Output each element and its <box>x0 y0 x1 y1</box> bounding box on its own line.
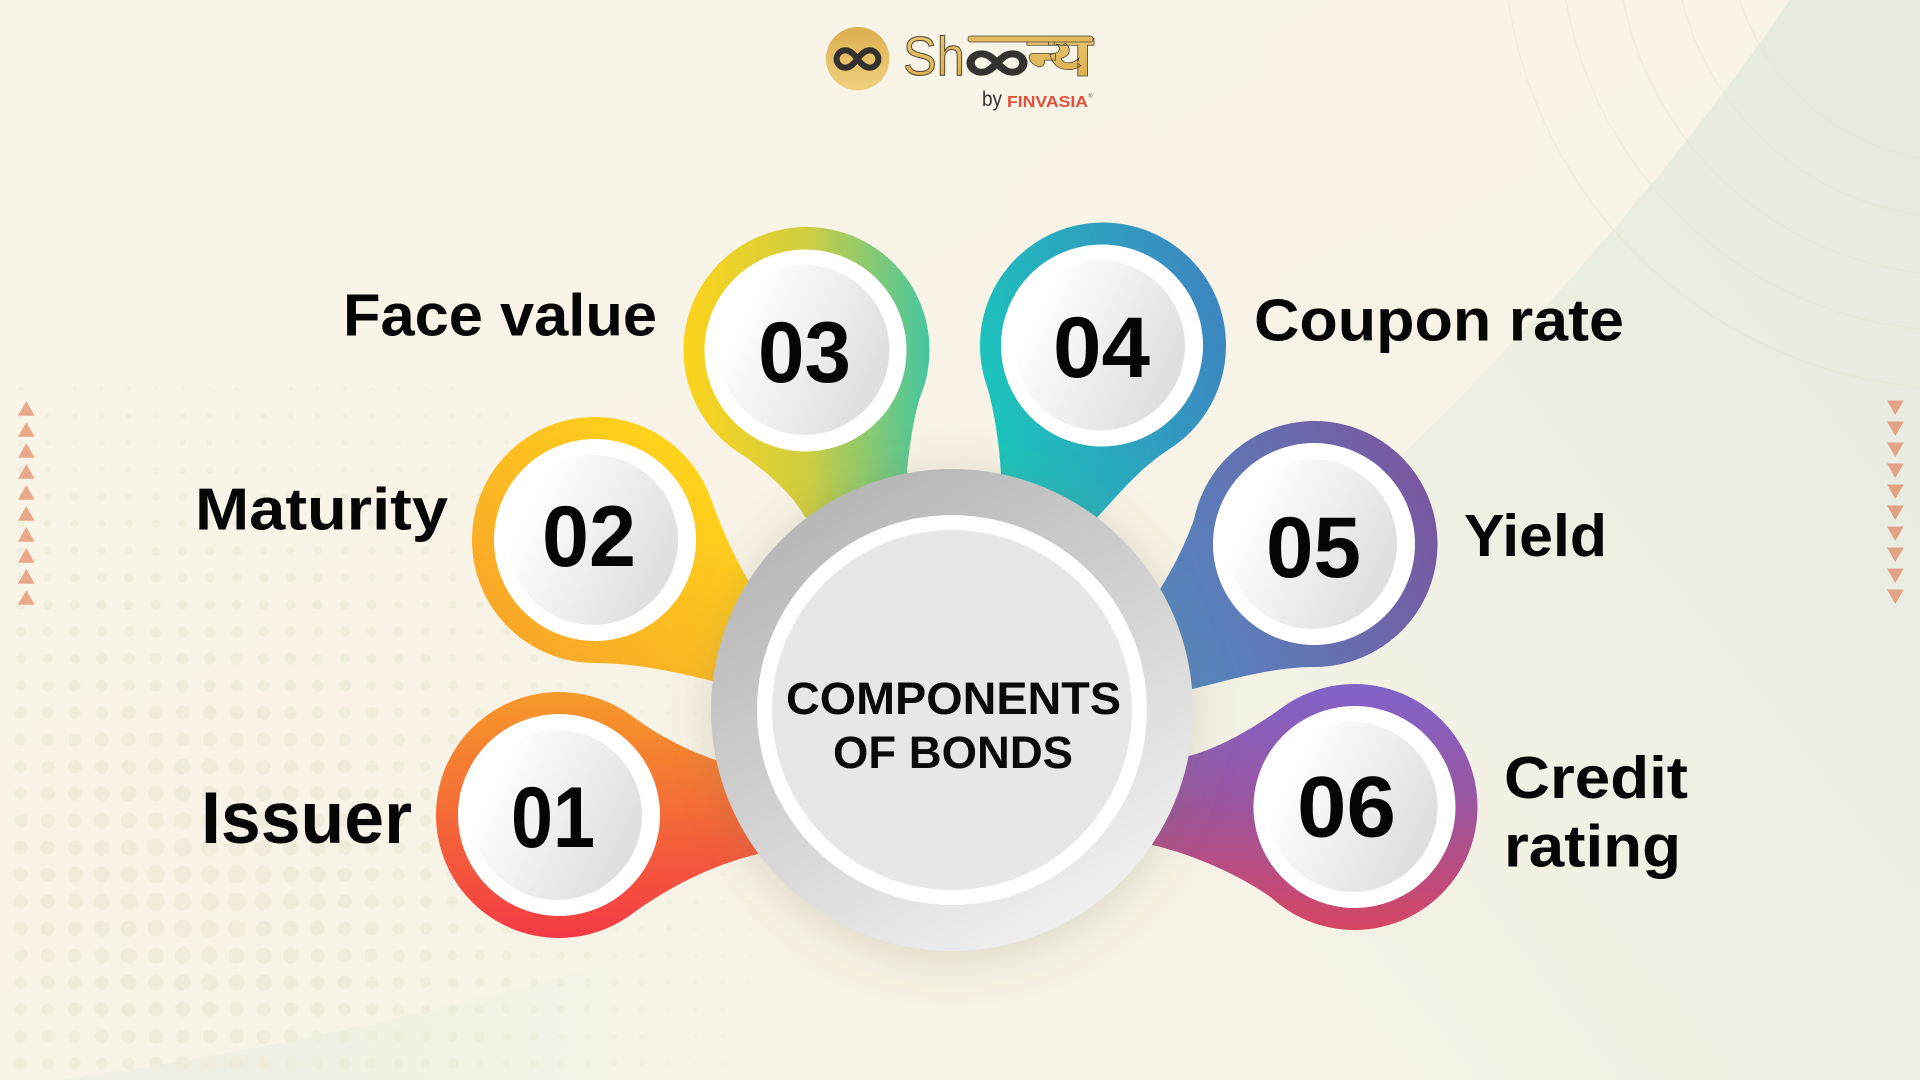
label: credit rating: Credit <box>1504 745 1688 811</box>
petal 06 <box>1100 684 1478 930</box>
concentric arcs <box>1508 0 1920 387</box>
logo by finvasia: ® <box>1088 93 1093 100</box>
number badge 06 <box>1254 706 1456 908</box>
left triangle column <box>18 401 35 605</box>
center title: COMPONENTS <box>786 673 1121 724</box>
petal 05 <box>1100 421 1438 700</box>
number badge 01 <box>458 714 660 916</box>
logo by finvasia: FINVASIA <box>1007 94 1088 111</box>
logo wordmark: न्य <box>1027 22 1094 89</box>
center circle <box>711 469 1193 951</box>
label: issuer: Issuer <box>201 778 412 859</box>
number badge 02 <box>494 439 696 641</box>
logo icon <box>826 27 889 90</box>
number badge 04: 04 <box>1053 300 1150 396</box>
background swoosh top right <box>880 0 1920 1080</box>
label: coupon rate: Coupon rate <box>1254 288 1624 354</box>
petal 04 <box>980 222 1226 560</box>
label: credit rating <box>1504 745 1688 880</box>
petal 01 <box>436 692 800 938</box>
label: yield: Yield <box>1464 503 1607 569</box>
number badge 05 <box>1213 443 1415 645</box>
halftone dot pattern <box>14 413 592 1070</box>
number badge 03: 03 <box>758 305 851 401</box>
label: maturity: Maturity <box>195 476 448 542</box>
number badge 05: 05 <box>1266 500 1361 596</box>
right triangle column <box>1887 400 1904 604</box>
petal 03 <box>684 227 950 600</box>
logo wordmark: Sh <box>903 25 965 87</box>
number badge 04 <box>1001 244 1203 446</box>
logo by finvasia: by <box>982 88 1002 111</box>
petal 02 <box>472 417 800 681</box>
number badge 06: 06 <box>1297 760 1396 856</box>
number badge 02: 02 <box>542 489 636 585</box>
logo by finvasia <box>982 88 1093 111</box>
center shadow <box>707 471 1197 961</box>
label: face value: Face value <box>343 283 657 349</box>
center title <box>786 673 1121 778</box>
number badge 01: 01 <box>511 770 595 866</box>
logo wordmark <box>903 22 1094 89</box>
label: credit rating: rating <box>1504 814 1681 880</box>
center title: OF BONDS <box>833 727 1073 778</box>
logo <box>826 22 1094 111</box>
number badge 03 <box>704 250 906 452</box>
background swoosh bottom left <box>60 960 620 1080</box>
